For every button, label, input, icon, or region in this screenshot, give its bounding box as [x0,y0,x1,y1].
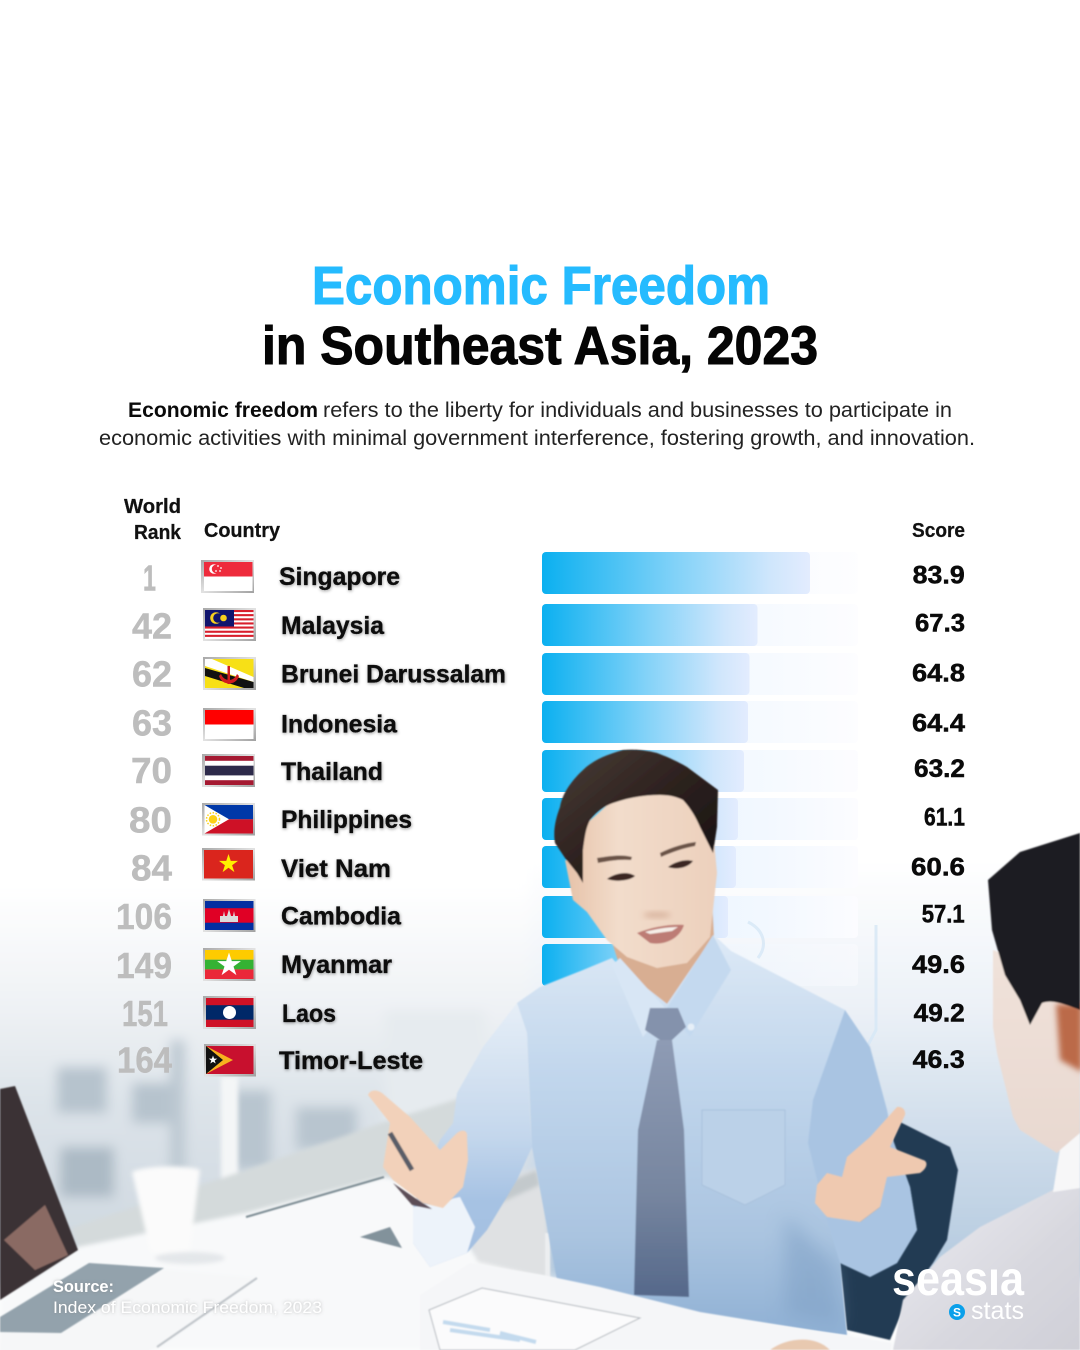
flag: Indonesia [203,708,256,741]
laptop [0,1086,164,1333]
title [262,256,818,376]
his collar [1053,1133,1080,1192]
logo sub-wordmark: stats [971,1297,1024,1325]
flag: Timor-Leste [204,1044,256,1076]
his shirt [893,1180,1080,1350]
column headers: Score [912,520,965,542]
shirt pocket [702,1110,785,1205]
bar track and fill: Myanmar [542,944,858,986]
world rank numbers [116,558,172,1080]
world rank numbers: 1 [143,558,156,598]
flag: Malaysia [203,608,256,641]
neck [608,900,714,1004]
right sleeve [808,1010,917,1277]
country names: Singapore [279,563,400,591]
shirt body [517,935,917,1335]
nose shadow [643,912,671,918]
icon: coffee cup on desk [132,1166,225,1264]
world rank numbers: 149 [116,945,172,986]
description paragraph: refers to the liberty for individuals and businesses to participate in [323,398,952,422]
bar track and fill: Thailand [542,750,858,792]
bar track and fill: Viet Nam [542,846,858,888]
flag: Philippines [202,803,255,836]
bar track and fill: Singapore [542,552,858,594]
photo: desk foreground [420,1263,891,1350]
his hair [988,833,1080,1025]
world rank numbers: 106 [116,896,172,937]
mouth [637,925,684,944]
description paragraph [99,398,975,450]
score values: 46.3 [913,1046,965,1074]
score values: 60.6 [911,854,965,882]
score values: 67.3 [915,610,965,638]
score values: 49.2 [914,1000,965,1028]
photo: left hand with pen [368,1091,468,1209]
score values [911,561,965,1074]
score values: 61.1 [924,804,965,832]
world rank numbers: 164 [117,1040,172,1080]
title line 1: Economic Freedom [312,256,770,316]
logo: seasia stats [894,1269,1024,1320]
logo icon: S [953,1306,961,1320]
country names [279,563,506,1075]
world rank numbers: 70 [131,750,172,791]
necktie [634,1008,689,1297]
foreground hand at bottom [770,1339,830,1350]
photo: central man in blue shirt [413,750,917,1335]
title line 2: in Southeast Asia, 2023 [262,316,818,376]
country names: Laos [282,1000,336,1028]
flag: Myanmar [203,948,256,981]
score values: 63.2 [914,755,965,783]
score values: 64.8 [912,660,965,688]
world rank numbers: 84 [131,848,172,888]
source note: Source: [53,1277,114,1296]
flag: Brunei [203,657,256,690]
flag: Thailand [202,754,255,787]
faint arcs behind the man [748,922,876,1045]
bar track and fill: Brunei Darussalam [542,653,858,695]
country names: Myanmar [281,951,392,979]
eyebrows [597,842,696,863]
column headers [124,496,965,544]
left sleeve [413,1003,532,1267]
world rank numbers: 151 [122,993,168,1034]
chair behind the man [840,1122,958,1340]
his face [993,950,1080,1153]
face [565,792,717,968]
document on desk [429,1288,640,1350]
source note [53,1277,322,1317]
score values: 57.1 [922,901,965,929]
his ear [1056,1004,1080,1072]
photo: right hand [815,1107,926,1222]
country names: Thailand [281,758,383,786]
photo: foreground man from behind [893,833,1080,1350]
hair [554,750,718,883]
flag: Singapore [201,560,254,593]
shirt lower-right shadow [785,1215,840,1325]
flag: Viet Nam [202,848,255,880]
description paragraph: Economic freedom [128,398,318,422]
score values: 64.4 [912,710,965,738]
left cuff [413,1197,475,1267]
column headers: Rank [134,522,182,544]
shirt collar [612,935,731,1037]
country flags [201,560,256,1076]
world rank numbers: 42 [132,606,172,646]
bar track and fill: Malaysia [542,604,858,646]
country names: Brunei Darussalam [281,660,506,688]
bar track and fill: Indonesia [542,701,858,743]
country names: Malaysia [281,612,385,640]
column headers: World [124,496,181,518]
eyes [607,860,693,881]
bar chart: score bars [542,552,858,986]
flag: Cambodia [203,899,256,932]
world rank numbers: 63 [132,702,172,744]
world rank numbers: 80 [129,800,172,840]
flag: Laos [203,996,256,1029]
bar track and fill: Philippines [542,798,858,840]
country names: Viet Nam [281,855,391,883]
background photo: office window and desk [0,860,1080,1350]
country names: Philippines [281,806,412,834]
logo wordmark: seasia [892,1253,1024,1306]
score values: 83.9 [913,561,965,589]
source note: Index of Economic Freedom, 2023 [53,1298,322,1317]
country names: Indonesia [281,710,398,738]
score values: 49.6 [912,951,965,979]
country names: Cambodia [281,902,402,930]
world rank numbers: 62 [132,654,172,694]
description paragraph: economic activities with minimal government interference, fostering growth, and innovation. [99,426,975,450]
column headers: Country [204,520,281,542]
bar track and fill: Cambodia [542,896,858,938]
country names: Timor-Leste [279,1047,423,1075]
